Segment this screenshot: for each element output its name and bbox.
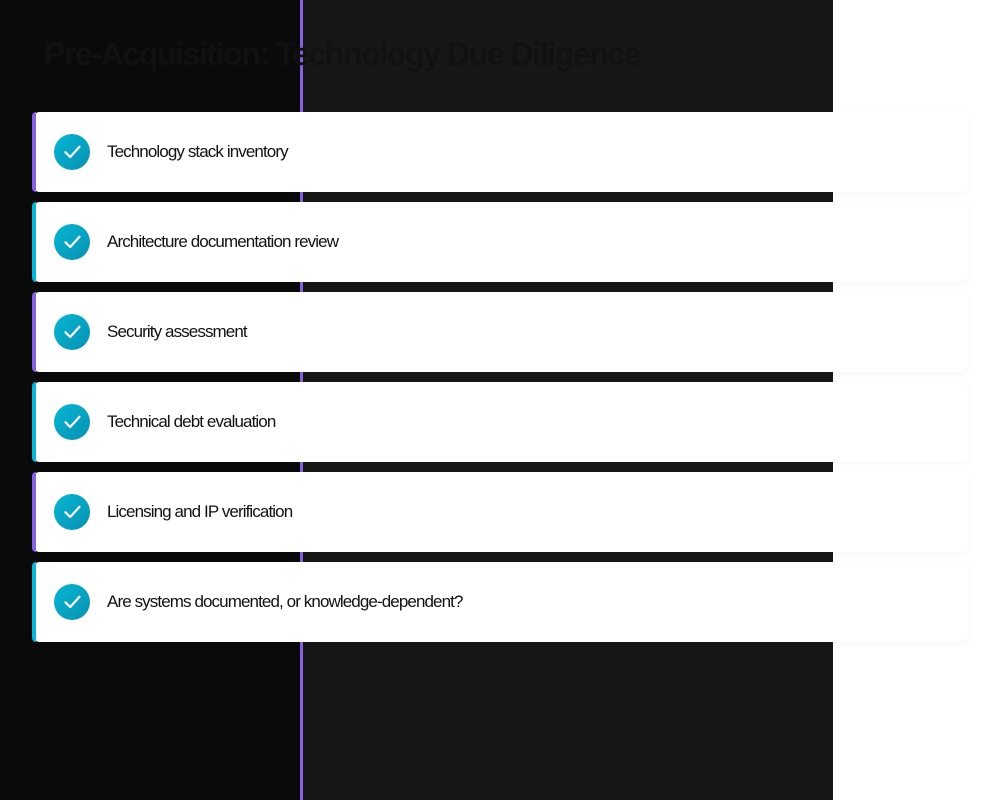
label: Technology stack inventory xyxy=(107,142,288,161)
label: Licensing and IP verification xyxy=(107,502,292,521)
icon: check xyxy=(54,134,90,170)
checklist item: technology stack inventory xyxy=(32,112,968,192)
label: Technical debt evaluation xyxy=(107,412,275,431)
label: Architecture documentation review xyxy=(107,232,338,251)
checklist item: architecture documentation review xyxy=(32,202,968,282)
checklist item: security assessment xyxy=(32,292,968,372)
checklist item: licensing and IP verification xyxy=(32,472,968,552)
icon: check xyxy=(54,584,90,620)
label: Are systems documented, or knowledge-dependent? xyxy=(107,592,463,611)
label: Security assessment xyxy=(107,322,247,341)
vertical purple line xyxy=(300,0,303,800)
title: Pre-Acquisition: Technology Due Diligence xyxy=(44,36,640,72)
checklist item: systems documented question xyxy=(32,562,968,642)
icon: check xyxy=(54,404,90,440)
icon: check xyxy=(54,224,90,260)
dark background panel: right xyxy=(303,0,833,800)
icon: check xyxy=(54,494,90,530)
checklist item: technical debt evaluation xyxy=(32,382,968,462)
icon: check xyxy=(54,314,90,350)
dark background panel: left xyxy=(0,0,300,800)
